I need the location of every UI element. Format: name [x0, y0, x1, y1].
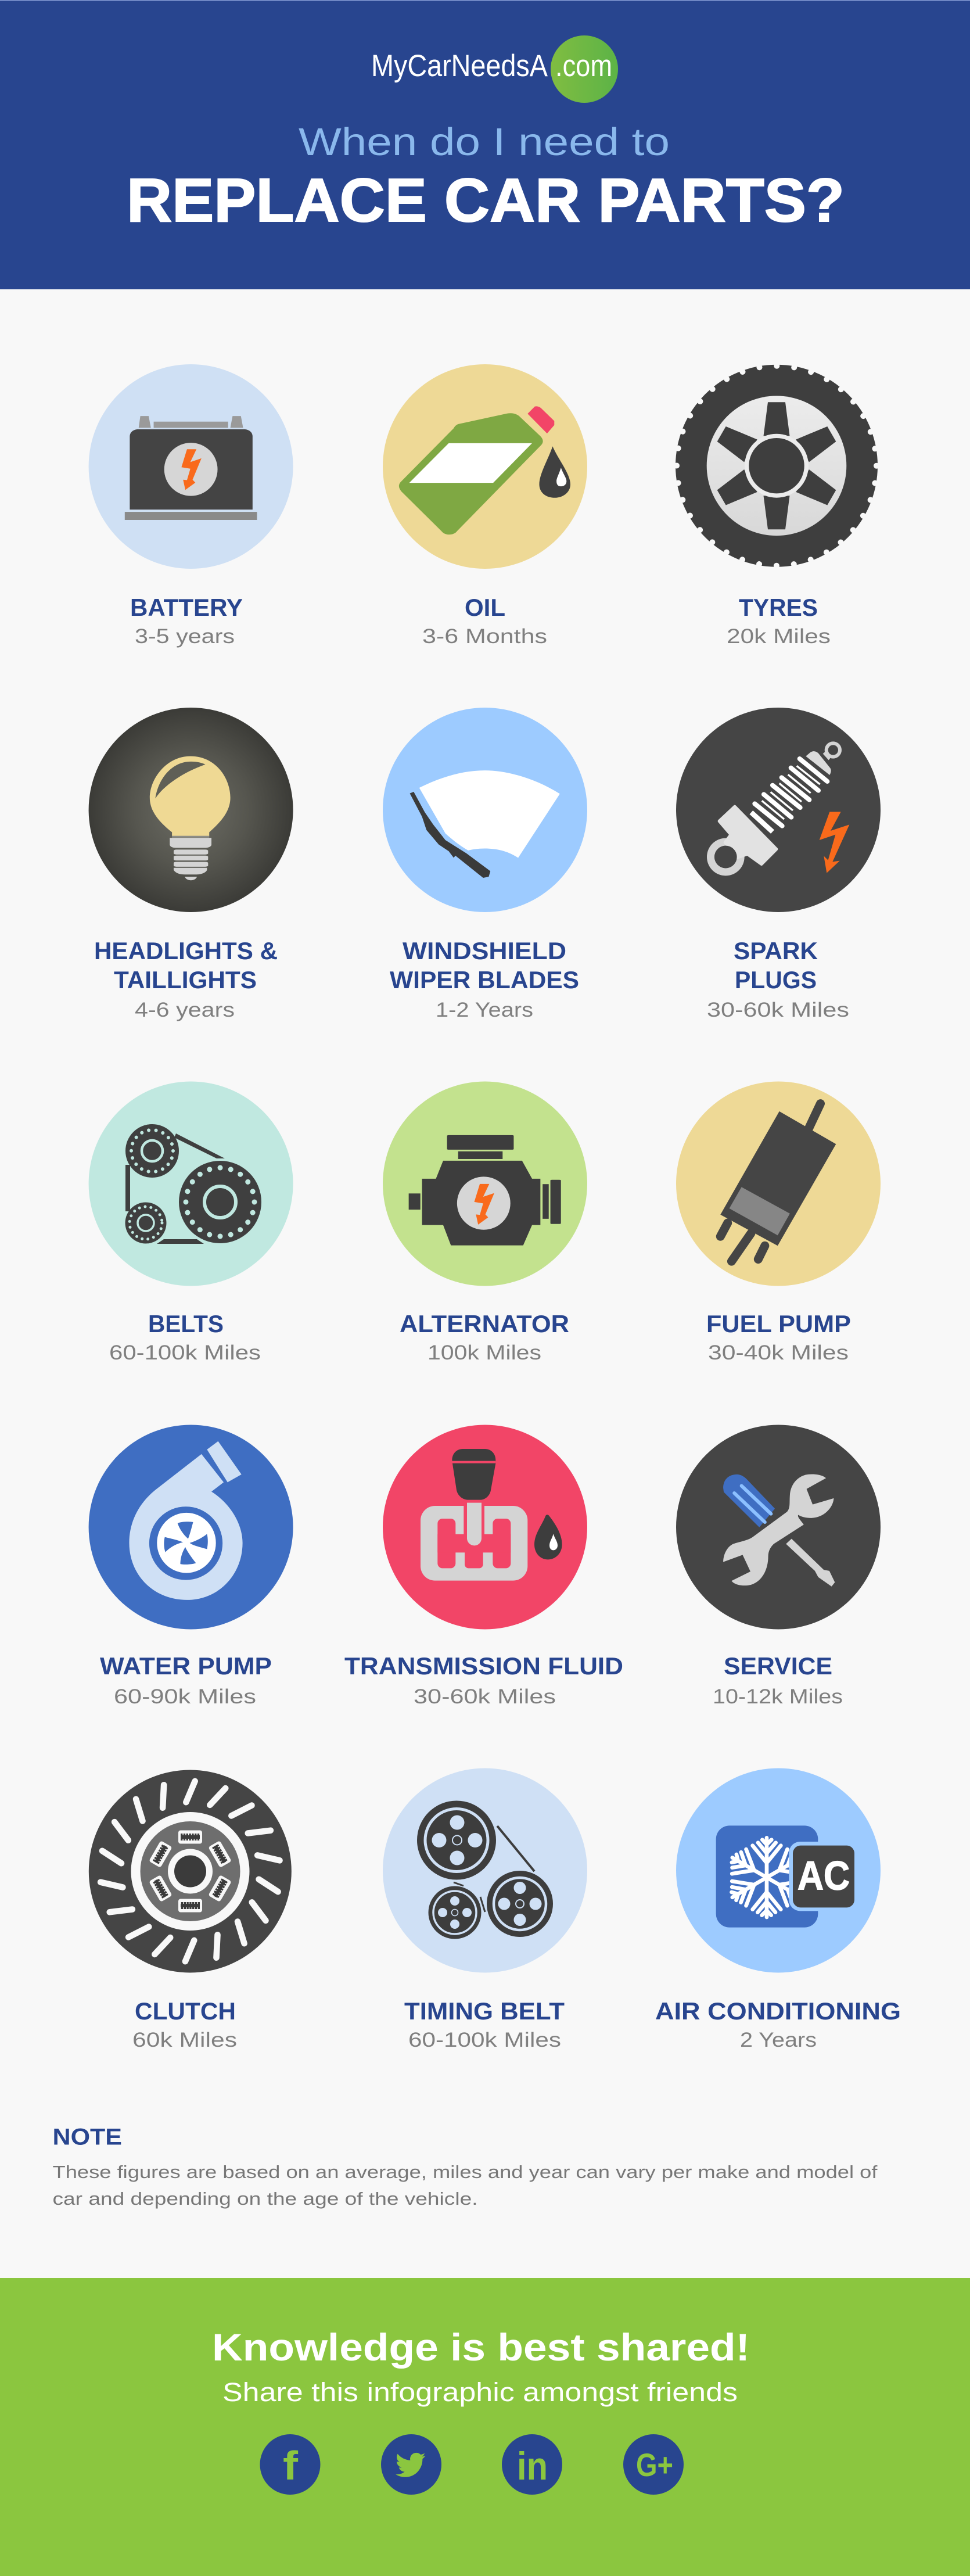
interval: 60-100k Miles — [109, 1341, 261, 1364]
panel: service — [676, 1425, 881, 1708]
icon: battery — [125, 416, 257, 520]
icon: linkedin — [502, 2434, 562, 2495]
panel: timing belt — [383, 1768, 587, 2051]
panel: clutch — [89, 1770, 292, 2051]
icon: google plus: G+ — [636, 2446, 673, 2483]
interval: 60k Miles — [132, 2029, 237, 2051]
interval: 3-6 Months — [422, 625, 547, 648]
title: REPLACE CAR PARTS? — [127, 166, 845, 235]
logo: MyCarNeedsA.com — [371, 35, 618, 103]
label: TRANSMISSION FLUID — [344, 1652, 623, 1680]
interval: 1-2 Years — [436, 999, 533, 1021]
label: CLUTCH — [135, 1997, 236, 2025]
icon: linkedin: in — [517, 2444, 548, 2488]
note text: These figures are based on an average, miles and year can vary per make and model of — [52, 2162, 878, 2182]
icon: alternator — [409, 1135, 561, 1246]
label: ALTERNATOR — [400, 1310, 569, 1337]
icon: water pump — [129, 1441, 243, 1600]
label line 2: WIPER BLADES — [390, 966, 579, 993]
label: HEADLIGHTS & — [94, 937, 278, 964]
label: SPARK — [734, 937, 818, 964]
panel: fuel pump — [676, 1082, 881, 1364]
label: OIL — [465, 594, 505, 621]
label: WINDSHIELD — [403, 937, 566, 964]
footer subheading: Share this infographic amongst friends — [222, 2377, 738, 2407]
panel: transmission fluid — [344, 1425, 623, 1708]
icon: google plus — [623, 2434, 684, 2495]
interval: 100k Miles — [427, 1341, 541, 1364]
footer heading: Knowledge is best shared! — [212, 2326, 750, 2369]
panel: water pump — [89, 1425, 293, 1708]
icon: clutch disc — [89, 1770, 292, 1973]
icon: light bulb — [150, 756, 231, 880]
icon: fuel pump — [720, 1104, 836, 1261]
panel: header — [0, 0, 970, 289]
icon: facebook — [260, 2434, 321, 2495]
interval: 3-5 years — [135, 625, 235, 648]
label: WATER PUMP — [100, 1652, 272, 1680]
label: SERVICE — [724, 1652, 832, 1680]
icon: facebook: f — [283, 2443, 299, 2488]
icon: twitter — [381, 2434, 441, 2495]
panel: air conditioning — [655, 1768, 901, 2051]
panel: footer share — [0, 2278, 970, 2576]
panel: spark plugs — [676, 708, 881, 1021]
logo: MyCarNeedsA.com: MyCarNeedsA — [371, 49, 548, 83]
label: BATTERY — [130, 594, 243, 621]
note text — [52, 2162, 878, 2209]
interval: 30-60k Miles — [707, 999, 849, 1021]
label: AIR CONDITIONING — [655, 1997, 901, 2025]
panel: belts — [89, 1082, 293, 1364]
icon: belts and pulleys — [125, 1124, 261, 1244]
note text: car and depending on the age of the vehicle. — [52, 2188, 477, 2209]
panel: alternator — [383, 1082, 587, 1364]
subtitle: When do I need to — [299, 120, 670, 164]
panel: wiper blades — [383, 708, 587, 1021]
interval: 4-6 years — [135, 999, 235, 1021]
label: FUEL PUMP — [706, 1310, 851, 1337]
panel: headlights — [89, 708, 293, 1021]
icon: spark plug — [707, 741, 849, 876]
interval: 20k Miles — [727, 625, 831, 648]
label line 2: PLUGS — [735, 966, 817, 993]
icon: oil bottle and drop — [399, 406, 570, 534]
panel: battery — [89, 364, 293, 648]
interval: 10-12k Miles — [713, 1685, 843, 1708]
interval: 60-100k Miles — [408, 2029, 561, 2051]
label: BELTS — [148, 1310, 224, 1337]
icon: timing belt pulleys — [417, 1801, 553, 1939]
icon: windshield wiper — [410, 770, 560, 878]
label: TIMING BELT — [404, 1997, 565, 2025]
logo: MyCarNeedsA.com: .com — [555, 49, 612, 83]
icon: snowflake AC: AC — [797, 1853, 850, 1899]
panel: tyres — [676, 365, 878, 648]
label: TYRES — [739, 594, 818, 621]
interval: 60-90k Miles — [114, 1685, 256, 1708]
icon: snowflake AC — [716, 1825, 857, 1928]
interval: 30-60k Miles — [414, 1685, 556, 1708]
label line 2: TAILLIGHTS — [114, 966, 257, 993]
panel: oil — [383, 364, 587, 648]
icon: gear shifter and drop — [421, 1449, 562, 1581]
icon: tyre — [676, 365, 878, 567]
interval: 2 Years — [740, 2029, 817, 2051]
panel: note — [52, 2124, 878, 2209]
icon: wrench and screwdriver — [723, 1474, 835, 1587]
interval: 30-40k Miles — [708, 1341, 849, 1364]
note heading: NOTE — [52, 2124, 122, 2150]
